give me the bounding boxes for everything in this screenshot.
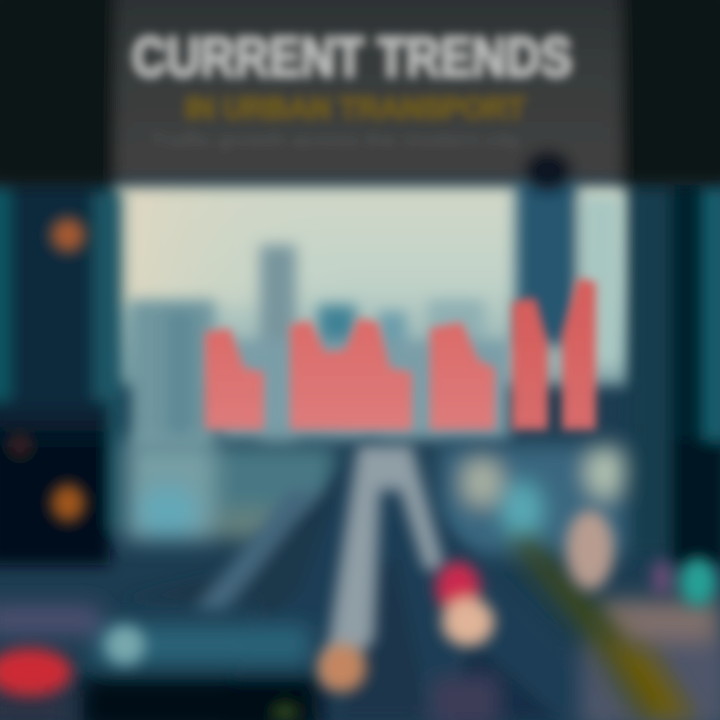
description text: Traffic growth across the modern city <box>150 130 520 150</box>
bar chart: red bars over skyline <box>205 278 596 430</box>
building window lights <box>8 218 85 522</box>
left dark building <box>0 180 122 565</box>
streetlight: magenta <box>652 560 672 596</box>
bar 3 <box>430 322 495 430</box>
tall tower right <box>516 175 622 365</box>
road light trails <box>322 445 445 690</box>
bar 5 <box>562 278 596 430</box>
streetlight: green <box>271 704 299 720</box>
vehicle: orange car <box>318 644 366 692</box>
bar 1 <box>205 328 264 430</box>
lower city blocks <box>125 440 626 555</box>
subtitle: IN URBAN TRANSPORT <box>185 92 525 125</box>
streetlight: teal marker <box>680 558 716 606</box>
right dark building <box>630 185 720 565</box>
road surface <box>120 440 640 720</box>
vehicle: red car <box>436 562 480 614</box>
lower foreground band <box>0 600 720 720</box>
bar 2 <box>290 318 412 430</box>
dark header panel <box>0 0 720 190</box>
olive median strip <box>510 540 695 720</box>
vehicle: red foreground car <box>0 648 72 696</box>
vehicles and lights <box>0 510 716 720</box>
bar 4 <box>512 298 548 430</box>
streetlight: pale glow <box>566 510 614 590</box>
title: CURRENT TRENDS <box>132 25 572 88</box>
streetlight: glow left <box>105 625 145 665</box>
sky backdrop <box>110 185 630 385</box>
distant skyline <box>130 245 510 450</box>
vehicle: pale car <box>442 598 494 646</box>
